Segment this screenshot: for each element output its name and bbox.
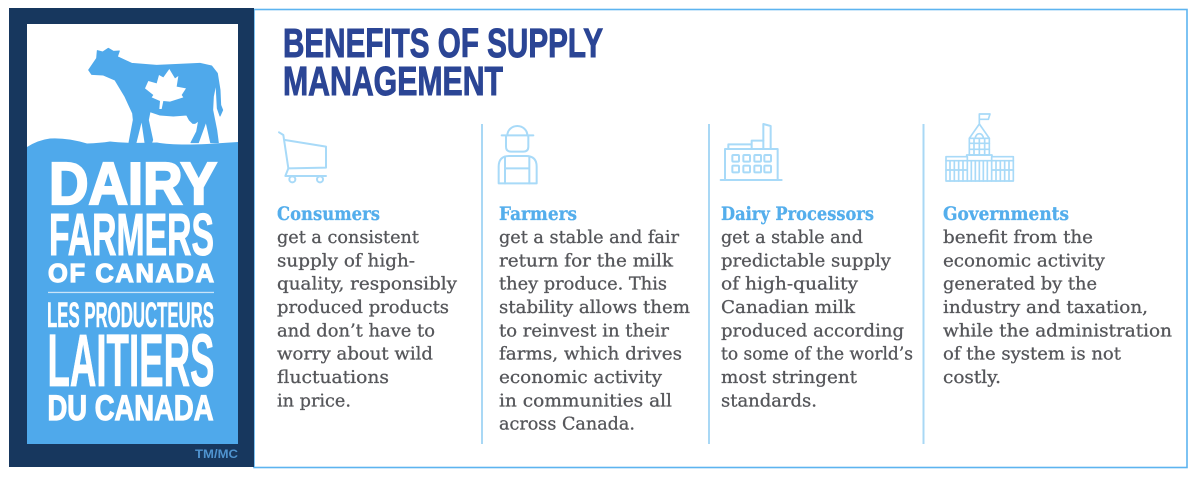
dairy processors text: of high-quality — [721, 274, 859, 295]
governments text: costly. — [943, 367, 1001, 388]
farmers text: Farmers — [499, 204, 577, 225]
logo wordmark: Dairy Farmers of Canada: DAIRY — [49, 151, 217, 217]
logo navy background — [9, 8, 254, 467]
consumers text — [277, 204, 458, 411]
governments text: industry and taxation, — [943, 297, 1148, 318]
trademark mark: TM/MC — [195, 447, 238, 461]
panel: farmers — [499, 126, 690, 435]
icon: maple leaf — [145, 69, 186, 109]
title: MANAGEMENT — [283, 58, 503, 104]
consumers text: fluctuations — [277, 367, 389, 388]
farmers text: they produce. This — [499, 274, 667, 295]
dairy processors text: predictable supply — [721, 250, 892, 271]
governments text: economic activity — [943, 250, 1106, 271]
consumers text: and don’t have to — [277, 320, 435, 341]
dairy processors text: produced according — [721, 320, 904, 341]
governments text: while the administration — [943, 320, 1172, 341]
icon: cow — [89, 48, 223, 143]
panel: consumers — [277, 132, 458, 411]
governments text: benefit from the — [943, 227, 1093, 248]
panel: governments — [943, 114, 1172, 388]
logo white field — [27, 24, 238, 204]
logo wordmark: Dairy Farmers of Canada: OF CANADA — [48, 260, 214, 288]
dairy processors text: to some of the world’s — [721, 344, 913, 365]
title: BENEFITS OF SUPPLY — [283, 20, 603, 66]
icon: factory — [721, 124, 782, 180]
governments text — [943, 204, 1172, 388]
logo panel — [9, 8, 254, 467]
dairy processors text: Dairy Processors — [721, 204, 874, 225]
dairy processors text — [721, 204, 913, 411]
farmers text: across Canada. — [499, 414, 635, 435]
consumers text: get a consistent — [277, 227, 420, 248]
logo divider — [48, 292, 214, 293]
governments text: of the system is not — [943, 344, 1122, 365]
farmers text: farms, which drives — [499, 344, 682, 365]
farmers text: return for the milk — [499, 250, 674, 271]
governments text: generated by the — [943, 274, 1097, 295]
logo wordmark: Les Producteurs Laitiers du Canada — [47, 296, 214, 428]
farmers text: economic activity — [499, 367, 663, 388]
farmers text: stability allows them — [499, 297, 690, 318]
consumers text: produced products — [277, 297, 449, 318]
dairy processors text: Canadian milk — [721, 297, 856, 318]
icon: government building — [946, 114, 1013, 181]
logo wordmark: Les Producteurs Laitiers du Canada: DU CANADA — [48, 389, 214, 428]
logo wordmark: Dairy Farmers of Canada — [48, 151, 217, 288]
panel: dairy processors — [721, 124, 913, 411]
logo panel: LES PRODUCTEURS — [47, 296, 214, 335]
icon: farmer — [499, 126, 537, 183]
consumers text: Consumers — [277, 204, 380, 225]
dairy processors text: standards. — [721, 390, 817, 411]
icon: shopping cart — [279, 132, 326, 182]
dairy processors text: get a stable and — [721, 227, 863, 248]
farmers text: get a stable and fair — [499, 227, 679, 248]
logo wordmark: Dairy Farmers of Canada: FARMERS — [49, 202, 214, 268]
consumers text: supply of high- — [277, 250, 415, 271]
consumers text: worry about wild — [277, 344, 433, 365]
consumers text: quality, responsibly — [277, 274, 458, 295]
dairy processors text: most stringent — [721, 367, 858, 388]
farmers text: in communities all — [499, 390, 672, 411]
content frame — [254, 10, 1187, 468]
title — [283, 20, 603, 104]
farmers text: to reinvest in their — [499, 320, 669, 341]
logo panel: LAITIERS — [48, 319, 214, 402]
governments text: Governments — [943, 204, 1069, 225]
farmers text — [499, 204, 690, 435]
consumers text: in price. — [277, 390, 351, 411]
logo blue ground — [27, 138, 238, 444]
column dividers — [482, 124, 924, 444]
